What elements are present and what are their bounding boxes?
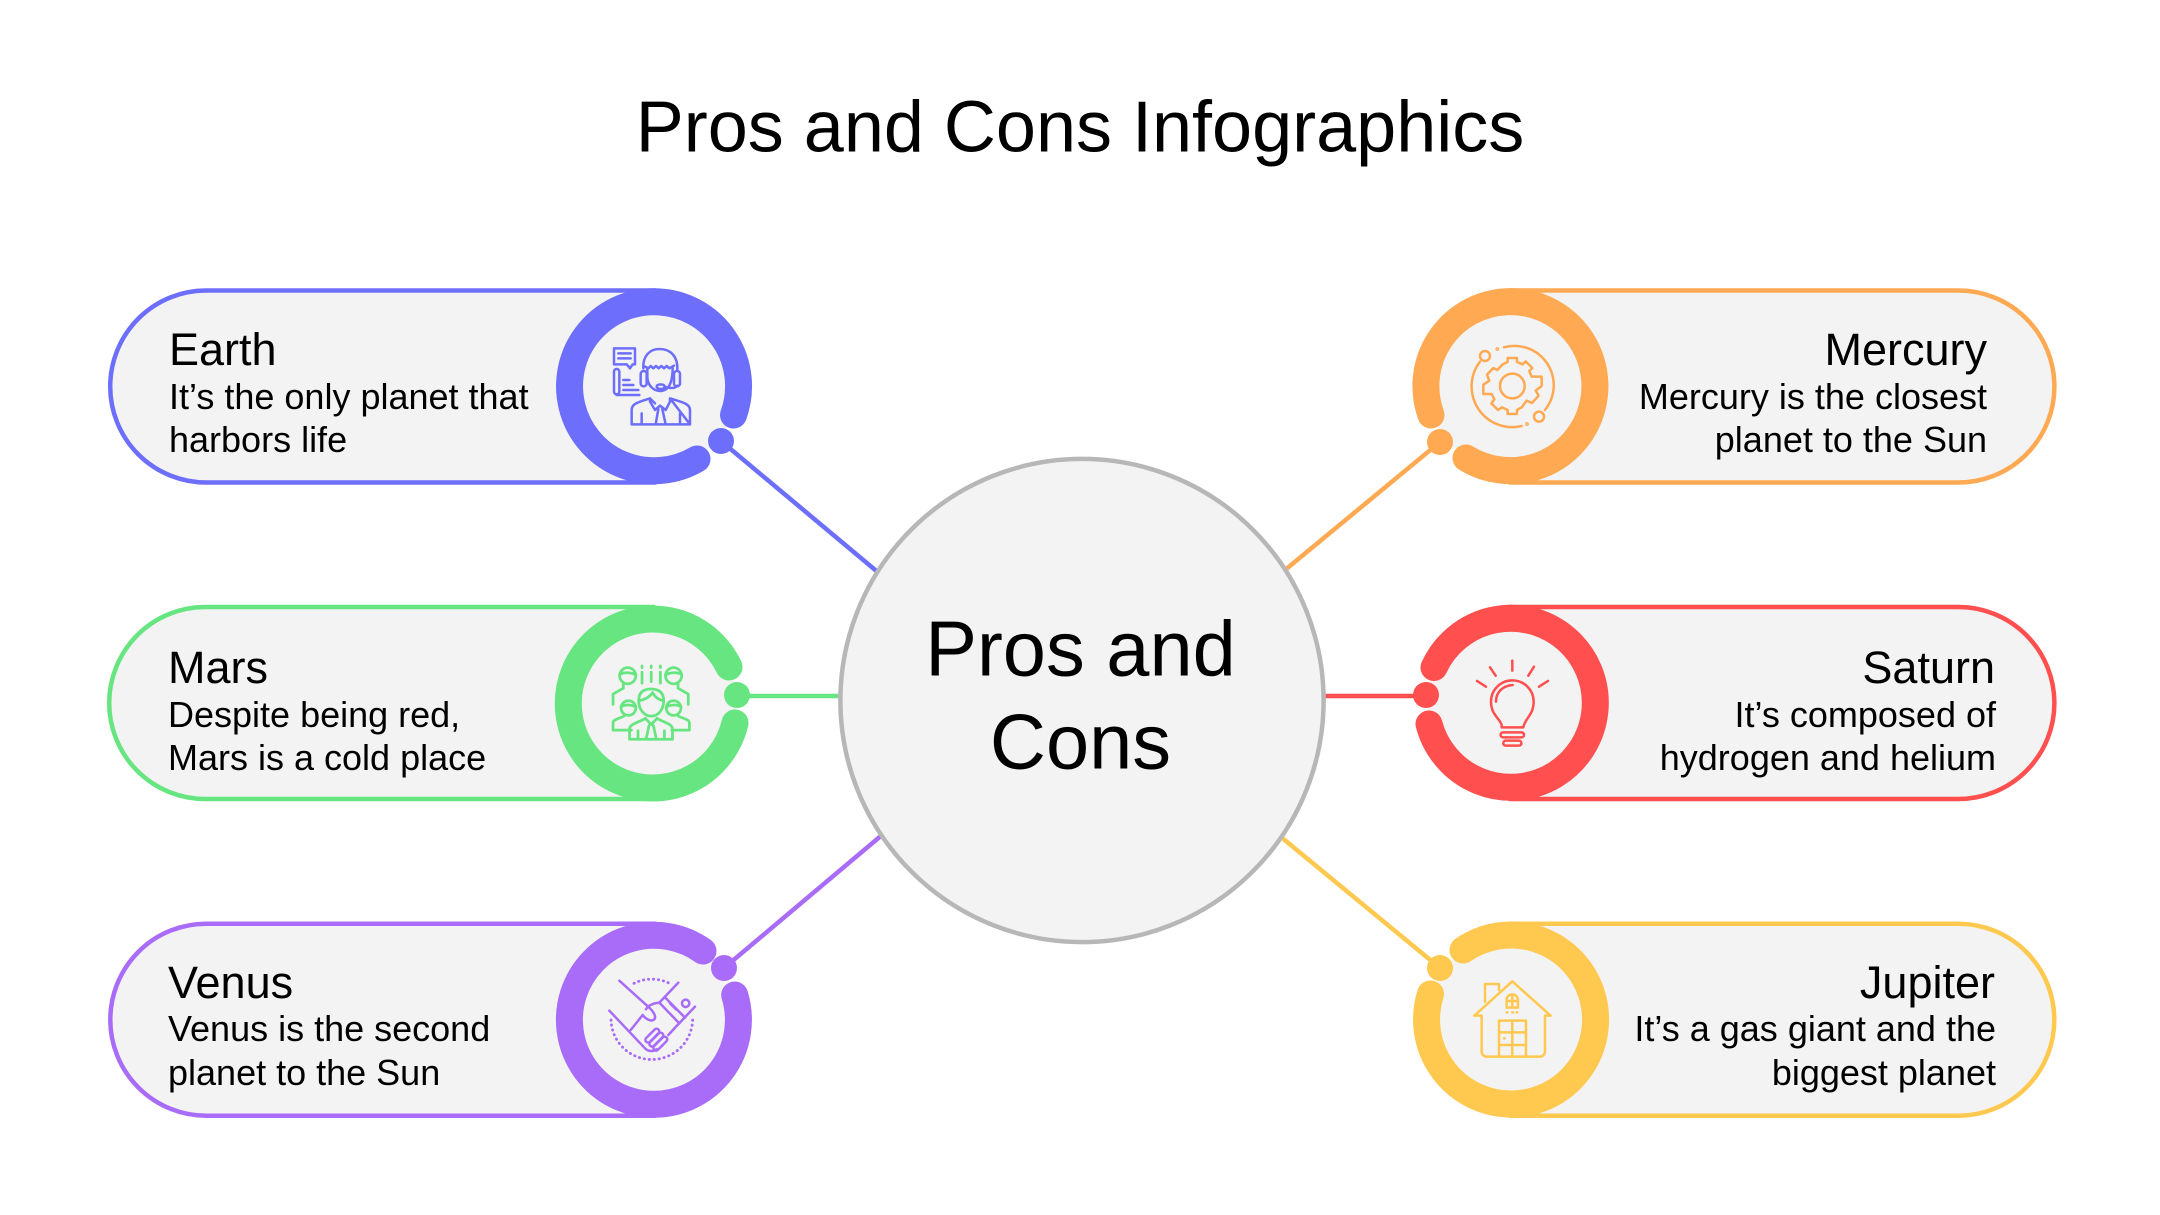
central circle: Pros and — [925, 606, 1236, 692]
icon: gear — [1472, 346, 1554, 427]
panel: Venus: planet to the Sun — [168, 1052, 440, 1093]
title: Pros and Cons Infographics — [636, 88, 1524, 168]
central circle — [840, 459, 1324, 942]
connector: Jupiter — [1281, 837, 1440, 968]
panel: Saturn — [1413, 607, 2054, 799]
connector: Venus — [724, 835, 882, 968]
icon: house — [1474, 981, 1551, 1057]
icon: support agent — [614, 348, 690, 424]
panel: Jupiter: biggest planet — [1772, 1052, 1996, 1093]
panel: Earth: It’s the only planet that — [169, 376, 529, 417]
panel: Earth: Earth — [169, 324, 277, 375]
panel: Mercury: Mercury is the closest — [1639, 376, 1987, 417]
panel: Earth — [110, 290, 739, 482]
icon: team — [613, 666, 689, 739]
panel: Venus: Venus is the second — [168, 1008, 490, 1049]
panel: Jupiter: Jupiter — [1860, 957, 1995, 1008]
panel: Jupiter: It’s a gas giant and the — [1634, 1008, 1996, 1049]
panel: Mercury — [1426, 290, 2054, 482]
panel: Jupiter — [1427, 924, 2054, 1116]
panel: Mars: Despite being red, — [168, 694, 460, 735]
panel: Mercury: planet to the Sun — [1715, 419, 1987, 460]
panel: Mars — [109, 607, 750, 799]
connector: Earth — [721, 441, 880, 574]
panel: Mars: Mars — [168, 642, 268, 693]
central circle: Cons — [990, 700, 1171, 786]
panel: Saturn: It’s composed of — [1735, 694, 1997, 735]
panel: Mercury: Mercury — [1824, 324, 1987, 375]
connector: Mars — [737, 694, 842, 698]
icon: handshake — [609, 979, 695, 1059]
icon: light bulb — [1477, 661, 1548, 746]
panel: Mars: Mars is a cold place — [168, 737, 486, 778]
panel: Venus: Venus — [168, 957, 293, 1008]
connector: Mercury — [1285, 442, 1440, 570]
connector: Saturn — [1322, 694, 1426, 698]
panel: Venus — [110, 924, 738, 1116]
panel: Saturn: Saturn — [1862, 642, 1995, 693]
panel: Saturn: hydrogen and helium — [1660, 737, 1996, 778]
panel: Earth: harbors life — [169, 419, 347, 460]
